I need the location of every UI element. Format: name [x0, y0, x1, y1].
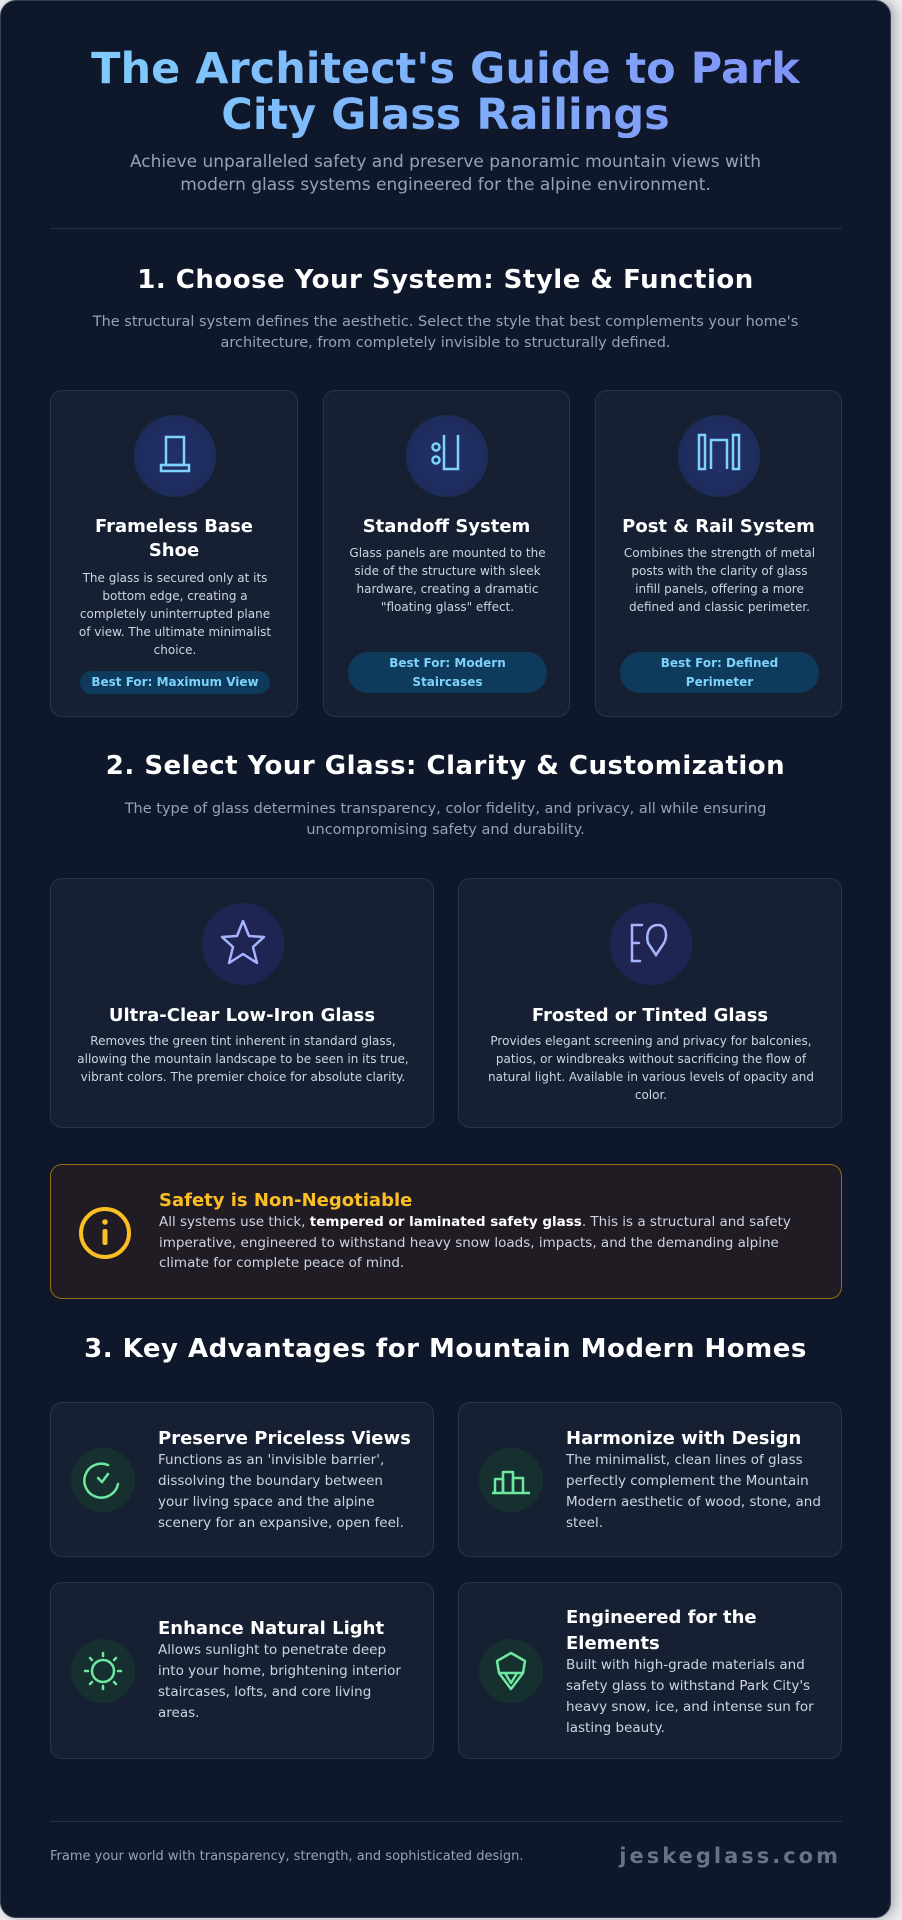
- icon: standoff: [406, 415, 488, 497]
- text: The minimalist, clean lines of glass perfectly complement the Mountain Modern aesthetic of wood, stone, and steel.: [566, 1452, 821, 1531]
- title: The Architect's Guide to Park: [91, 44, 800, 94]
- badge: Staircases: [412, 675, 483, 689]
- heading: section 2: 2. Select Your Glass: Clarity & Customization: [106, 751, 785, 781]
- heading: section 3: 3. Key Advantages for Mountain Modern Homes: [84, 1334, 807, 1364]
- icon: frosted: [610, 903, 692, 985]
- callout title: Safety is Non-Negotiable: [159, 1190, 412, 1211]
- panel: natural light: [50, 1582, 434, 1759]
- title: Enhance Natural Light: [158, 1618, 384, 1639]
- panel: engineered: [458, 1582, 842, 1759]
- badge: Best For: Maximum View: [91, 675, 259, 689]
- title: [1, 46, 890, 138]
- panel: preserve views: [50, 1402, 434, 1557]
- panel: standoff system: [323, 390, 570, 717]
- icon: sun: [71, 1639, 135, 1703]
- panel: frosted glass: [458, 878, 842, 1128]
- text: Functions as an 'invisible barrier', dissolving the boundary between your living space and the alpine scenery for an expansive, open feel.: [158, 1452, 404, 1531]
- icon: star: [202, 903, 284, 985]
- card text: Combines the strength of metal posts with the clarity of glass infill panels, offering a more defined and classic perimeter.: [624, 546, 815, 614]
- card title: [95, 516, 253, 561]
- card title: Post & Rail System: [622, 516, 815, 537]
- card title: Frosted or Tinted Glass: [532, 1005, 768, 1026]
- badge: [80, 671, 270, 694]
- panel: harmonize: [458, 1402, 842, 1557]
- footer tagline: Frame your world with transparency, strength, and sophisticated design.: [50, 1849, 523, 1864]
- icon: post and rail: [678, 415, 760, 497]
- panel: post & rail: [595, 390, 842, 717]
- badge: Best For: Modern: [389, 656, 506, 670]
- icon: shield: [479, 1639, 543, 1703]
- callout: safety: [50, 1164, 842, 1299]
- icon: check circle: [71, 1448, 135, 1512]
- subtitle: Achieve unparalleled safety and preserve panoramic mountain views with modern glass systems engineered for the alpine environment.: [130, 152, 761, 195]
- panel: low-iron glass: [50, 878, 434, 1128]
- badge: [620, 652, 819, 693]
- title: Engineered for the Elements: [566, 1607, 757, 1654]
- card title: Standoff System: [363, 516, 530, 537]
- heading: section 1: 1. Choose Your System: Style & Function: [137, 265, 754, 295]
- text: Built with high-grade materials and safety glass to withstand Park City's heavy snow, ice, and intense sun for lasting beauty.: [566, 1657, 814, 1736]
- icon: buildings: [479, 1448, 543, 1512]
- icon: info: [79, 1207, 131, 1259]
- panel: frameless base shoe: [50, 390, 298, 717]
- card text: Glass panels are mounted to the side of the structure with sleek hardware, creating a dramatic "floating glass" effect.: [349, 546, 546, 614]
- footer brand: jeskeglass.com: [619, 1844, 841, 1868]
- text: Allows sunlight to penetrate deep into your home, brightening interior staircases, lofts, and core living areas.: [158, 1642, 401, 1721]
- card title: Frameless Base: [95, 516, 253, 537]
- section 1 intro: The structural system defines the aesthetic. Select the style that best complements your home's architecture, from completely invisible to structurally defined.: [93, 314, 798, 351]
- card title: Shoe: [149, 540, 199, 561]
- section 2 intro: The type of glass determines transparency, color fidelity, and privacy, all while ensuring uncompromising safety and durability.: [125, 801, 766, 838]
- card title: Ultra-Clear Low-Iron Glass: [109, 1005, 375, 1026]
- badge: Perimeter: [686, 675, 753, 689]
- badge: [348, 652, 547, 693]
- card text: Provides elegant screening and privacy for balconies, patios, or windbreaks without sacrificing the flow of natural light. Available in various levels of opacity and color.: [488, 1034, 814, 1102]
- badge: Best For: Defined: [661, 656, 778, 670]
- card text: The glass is secured only at its bottom edge, creating a completely uninterrupted plane of view. The ultimate minimalist choice.: [79, 571, 271, 657]
- callout text: All systems use thick, tempered or laminated safety glass. This is a structural and safety imperative, engineered to withstand heavy snow loads, impacts, and the demanding alpine climate for complete peace of mind.: [159, 1214, 791, 1271]
- title: Harmonize with Design: [566, 1428, 801, 1449]
- icon: base shoe: [134, 415, 216, 497]
- card text: Removes the green tint inherent in standard glass, allowing the mountain landscape to be seen in its true, vibrant colors. The premier choice for absolute clarity.: [77, 1034, 409, 1084]
- title: Preserve Priceless Views: [158, 1428, 411, 1449]
- title: City Glass Railings: [221, 90, 670, 140]
